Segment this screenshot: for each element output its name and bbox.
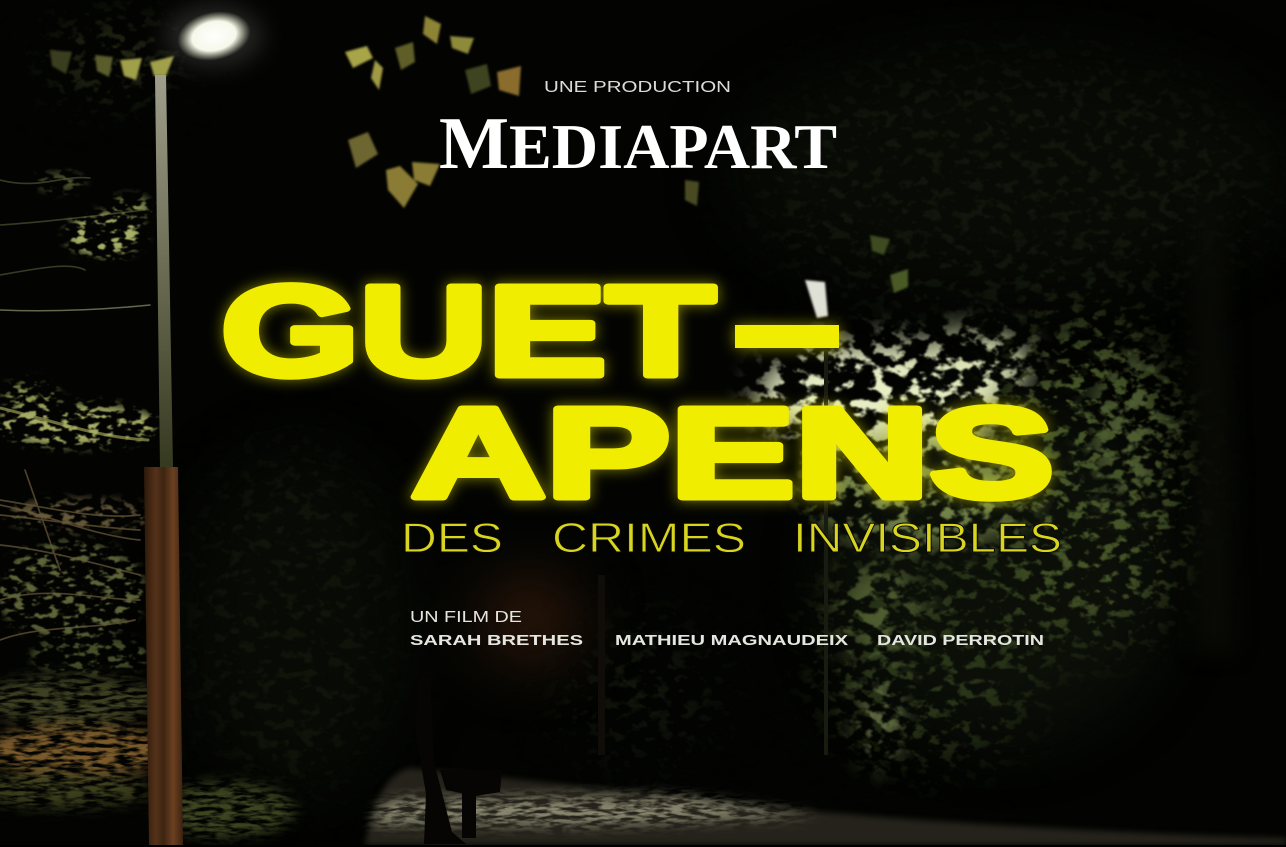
- subtitle: INVISIBLES: [793, 514, 1062, 561]
- subtitle: CRIMES: [552, 514, 746, 561]
- bench: [416, 677, 502, 844]
- dark tree masses: [190, 50, 1286, 790]
- street lamp post: [144, 75, 183, 845]
- park path: [365, 768, 1286, 845]
- producer line: UNE PRODUCTION: [544, 79, 731, 96]
- title glow: APENS: [411, 382, 1054, 525]
- subtitle: DES: [401, 514, 503, 561]
- film credit: MATHIEU MAGNAUDEIX: [615, 632, 848, 649]
- street lamp light: [166, 5, 262, 67]
- foliage: lit bush behind second lamp: [755, 330, 1170, 765]
- film credit: [410, 609, 1044, 649]
- Mediapart logo: MEDIAPART: [439, 103, 837, 185]
- film credit: DAVID PERROTIN: [877, 632, 1044, 649]
- left leaves: [0, 173, 160, 675]
- leaves at top centre: [50, 16, 908, 293]
- ground at lower left: [0, 675, 295, 838]
- film credit: UN FILM DE: [410, 609, 522, 626]
- title: [221, 260, 1054, 525]
- subtitle: [401, 514, 1062, 561]
- title glow: GUET: [221, 260, 715, 403]
- second lamp: [598, 280, 828, 755]
- left branches: [0, 178, 150, 640]
- tree trunk at right: [1195, 200, 1232, 650]
- bottom edge: [0, 845, 1286, 847]
- title: GUET: [221, 260, 715, 403]
- film credit: SARAH BRETHES: [410, 632, 583, 649]
- title: APENS: [411, 382, 1054, 525]
- title glow: [221, 260, 1054, 525]
